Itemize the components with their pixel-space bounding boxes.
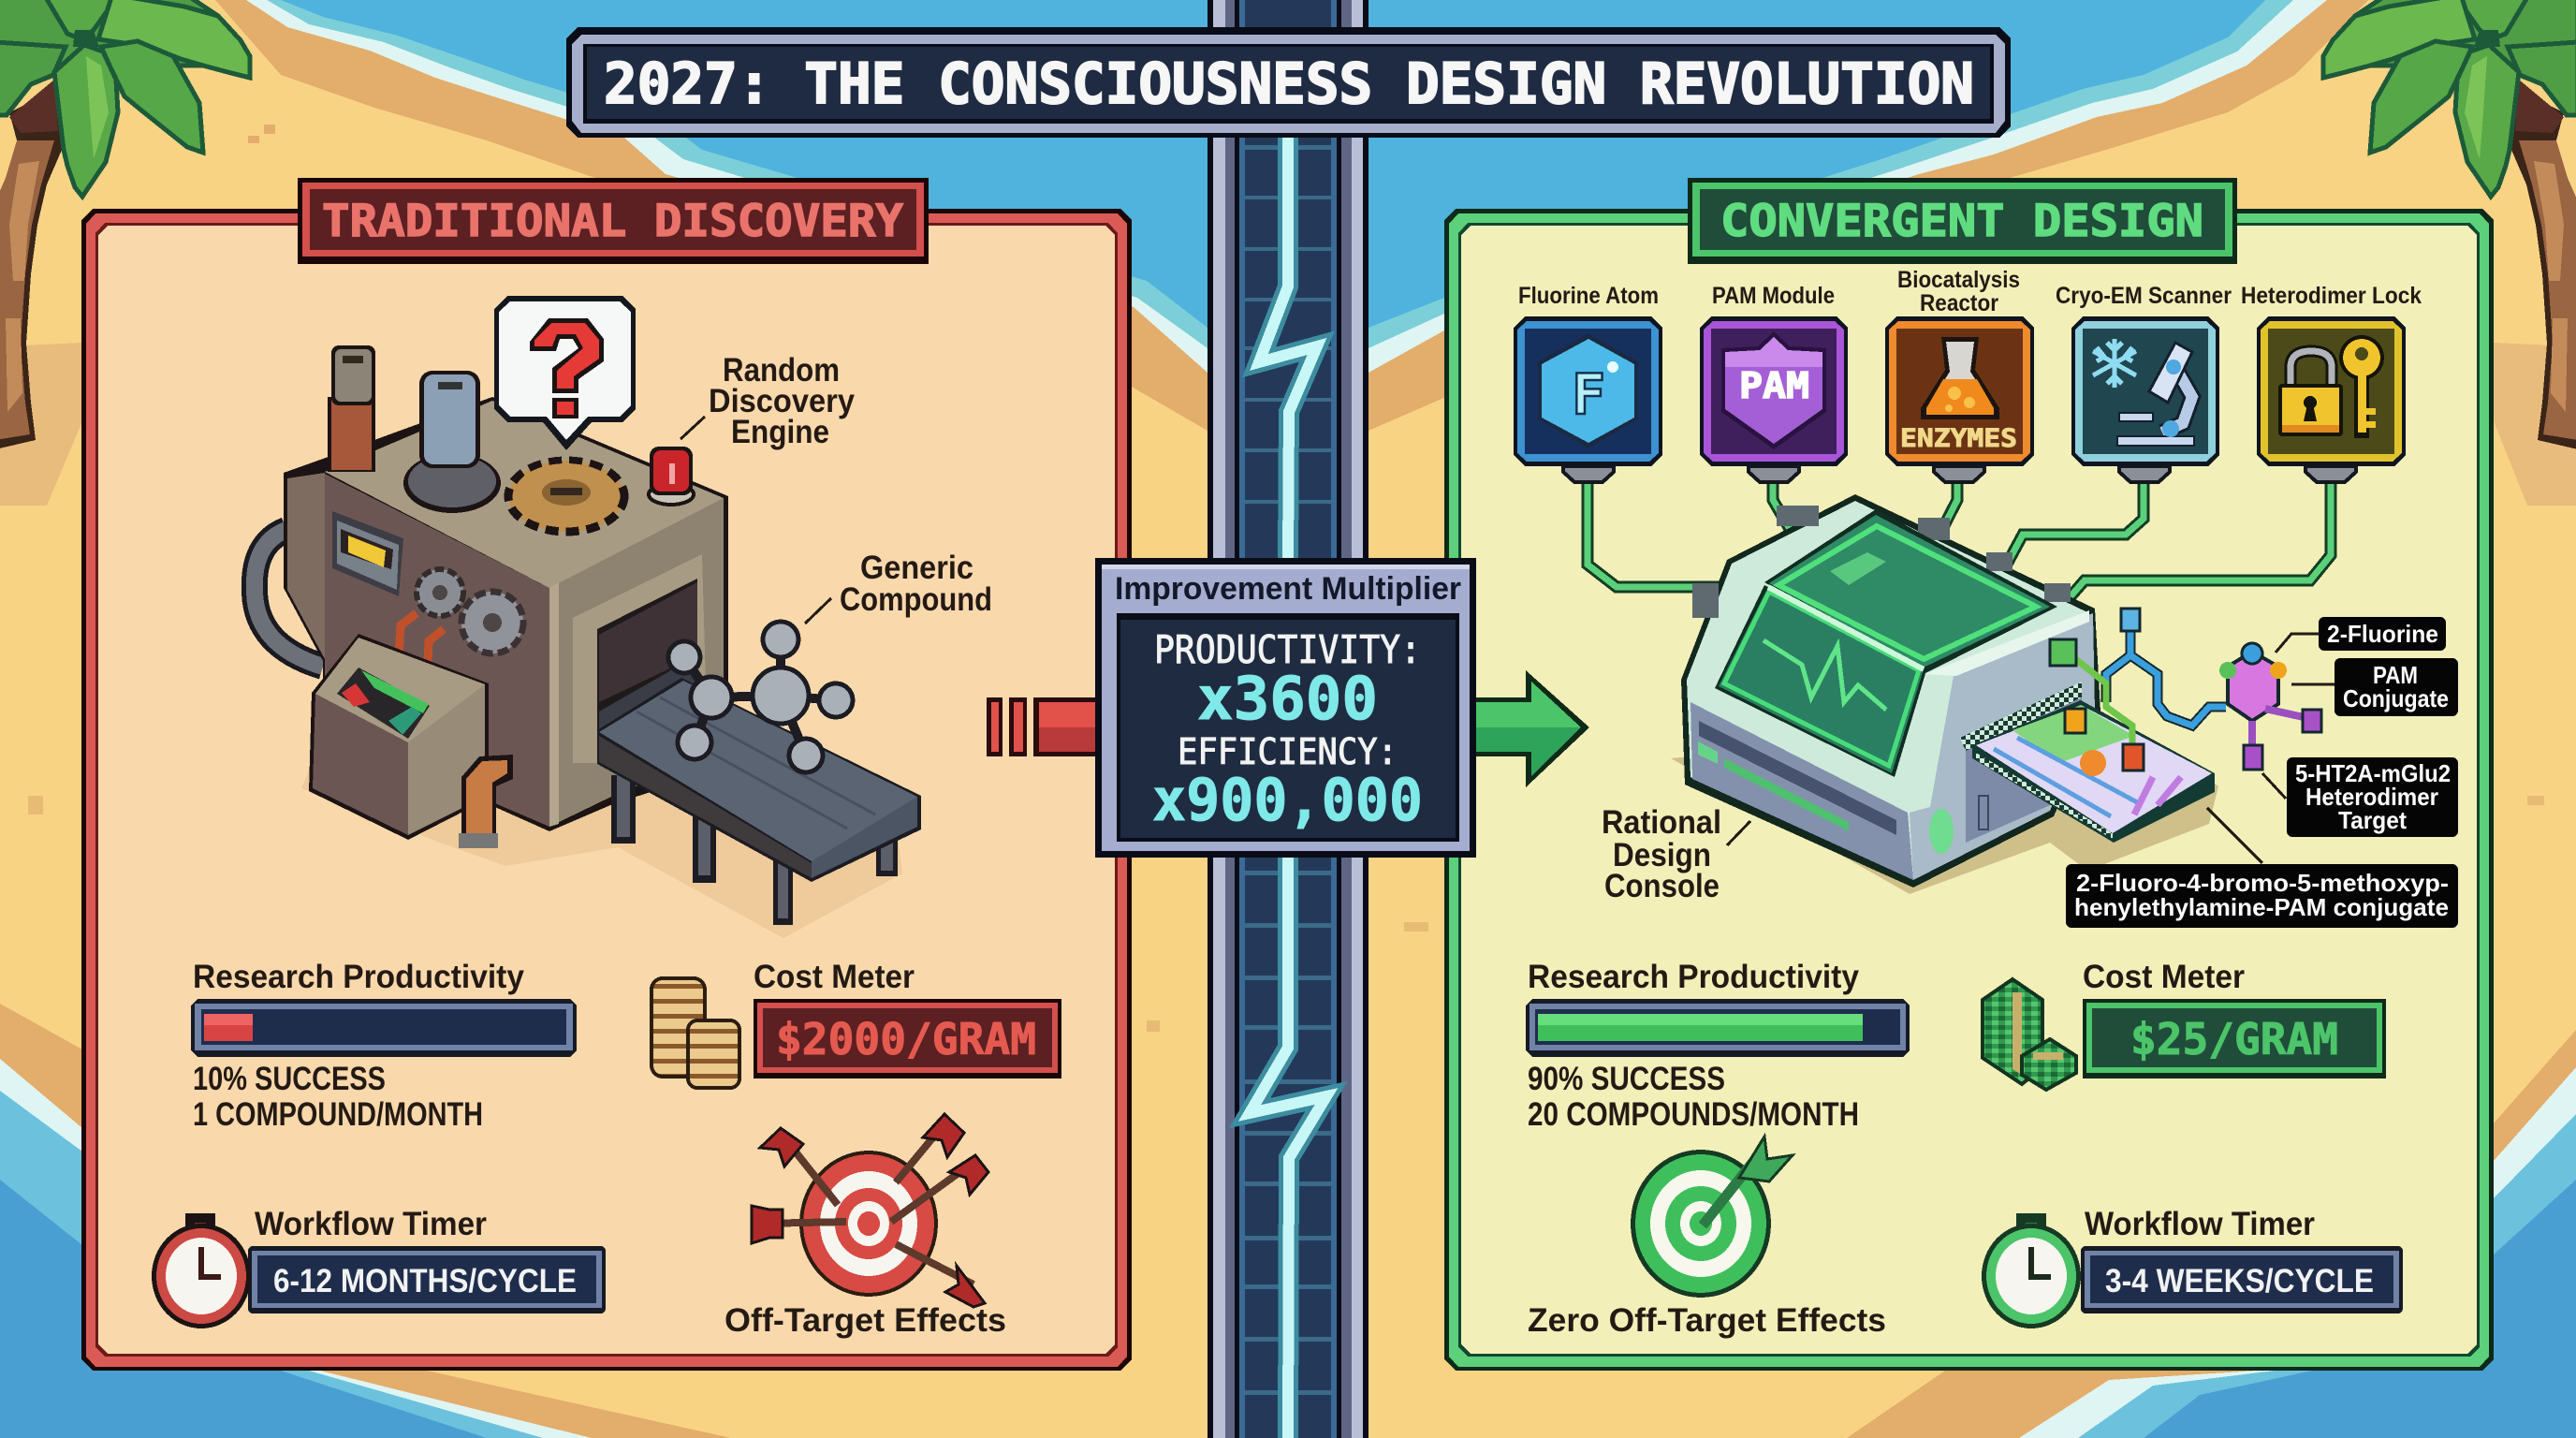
icon: PAM module: PAM Module [1712,283,1835,309]
off-target effects: traditional [724,1114,1006,1339]
cost meter: convergent [1983,959,2386,1090]
trunk [0,80,62,449]
research productivity meter: convergent: 20 COMPOUNDS/MONTH [1528,1096,1859,1133]
label: rational design console: Design [1613,837,1711,873]
label: rational design console [1602,804,1750,904]
callout: conjugate compound name: 2-Fluoro-4-bromo-5-methoxyp- [2076,869,2449,897]
icon: biocatalysis reactor: ENZYMES [1900,424,2017,453]
icon: fluorine atom: Fluorine Atom [1518,283,1659,309]
screen: upper lid [1764,509,2057,674]
icon: PAM module: PAM [1739,365,1809,406]
icon: cash stacks [1983,979,2076,1090]
cost meter: convergent: Cost Meter [2083,959,2245,995]
research productivity meter: traditional [191,959,577,1133]
connector wires [1588,481,2331,604]
conveyor legs [611,775,636,844]
productivity stat: x3600 [1197,665,1378,733]
icon: biocatalysis reactor: Reactor [1920,290,1998,316]
generic compound molecule [668,622,853,772]
multiplier heading: Improvement Multiplier [1115,571,1461,607]
grey gears [417,569,463,616]
speech bubble with question mark [494,296,636,450]
workflow timer: convergent: 3-4 WEEKS/CYCLE [2105,1263,2374,1299]
panel: traditional discovery [81,178,1132,1371]
callout: PAM conjugate: PAM [2373,661,2418,689]
hose [255,530,323,667]
callout: conjugate compound name: henylethylamine-PAM conjugate [2074,893,2449,921]
callout: heterodimer target [2262,757,2458,837]
trunk [2511,80,2576,449]
screen: front with heart trace [1715,585,1926,777]
research productivity meter: traditional: 1 COMPOUND/MONTH [193,1096,483,1133]
control box [309,634,489,840]
heading: traditional discovery: TRADITIONAL DISCOVERY [322,196,904,247]
callout: conjugate compound name [2066,808,2458,928]
bottom-right ocean [1847,1030,2576,1438]
levers [398,613,417,674]
icon: fluorine atom: F [1572,362,1605,428]
icon: biocatalysis reactor [1885,267,2034,482]
callout: heterodimer target: Heterodimer [2305,783,2438,811]
productivity stat: PRODUCTIVITY: [1154,627,1421,672]
leaf mass [2323,0,2576,115]
label: random discovery engine: Discovery [709,383,855,419]
tunnel opening [573,554,708,763]
icon: coin stacks [651,978,739,1088]
label: generic compound: Generic [860,550,973,586]
right side [1910,613,2095,880]
callout: 2-fluorine [2276,617,2446,653]
leaf mass [0,0,250,115]
research productivity meter: traditional: 10% SUCCESS [193,1061,386,1097]
icon: fluorine atom [1514,283,1662,482]
research productivity meter: convergent: Research Productivity [1528,959,1860,995]
label: generic compound: Compound [840,581,992,618]
icon: heterodimer lock: Heterodimer Lock [2241,283,2422,309]
research productivity meter: convergent [1526,959,1910,1133]
vent stacks [328,397,375,472]
off-target effects: traditional: Off-Target Effects [724,1302,1006,1339]
leaves [0,0,250,197]
zero off-target effects: convergent: Zero Off-Target Effects [1528,1302,1886,1339]
heading: convergent design: CONVERGENT DESIGN [1720,196,2203,247]
top ocean [215,0,2368,431]
icon: heterodimer lock [2241,283,2422,482]
yellow gauge [332,511,403,596]
arrow: red input [987,697,1095,756]
label: random discovery engine: Random [723,352,840,389]
callout: PAM conjugate [2291,658,2458,716]
top gear [508,461,624,532]
icon: cryo-EM scanner [2056,283,2232,482]
efficiency stat: EFFICIENCY: [1178,731,1398,772]
icon: green target with centered arrow [1631,1137,1793,1298]
cost meter: convergent: $25/GRAM [2130,1014,2338,1064]
label: rational design console: Rational [1602,804,1721,841]
label: random discovery engine [681,352,855,450]
cost meter: traditional: $2000/GRAM [776,1014,1036,1064]
callout: 2-fluorine: 2-Fluorine [2327,620,2438,648]
lightning line: lower [1250,858,1326,1438]
left palm tree [0,0,250,449]
console silhouette [1681,494,2100,888]
label: random discovery engine: Engine [731,414,829,450]
callout: heterodimer target: 5-HT2A-mGlu2 [2295,759,2451,787]
bottom-left ocean [0,1004,731,1438]
zero off-target effects: convergent [1528,1137,1886,1339]
arrow: green output [1476,670,1589,787]
research productivity meter: convergent: 90% SUCCESS [1528,1061,1725,1097]
wire sockets [1692,506,2071,618]
callout: heterodimer target: Target [2338,806,2407,834]
icon: PAM module [1700,283,1848,482]
lower front [1690,702,1913,880]
productivity stat [1154,627,1421,733]
designed molecule [2050,609,2321,770]
panel: convergent design [1444,178,2494,1371]
heading: convergent design [1688,178,2237,264]
label: generic compound [805,550,992,624]
cost meter: traditional [651,959,1061,1088]
machine: random discovery engine [255,296,921,938]
improvement multiplier panel [1095,558,1476,858]
workflow timer: traditional: 6-12 MONTHS/CYCLE [273,1263,577,1299]
label: rational design console: Console [1604,868,1720,904]
right palm tree [2323,0,2576,449]
lightning line: upper [1259,138,1317,558]
workflow timer: traditional [152,1206,606,1328]
icon: red stopwatch [152,1213,251,1328]
icon: green stopwatch [1982,1213,2081,1328]
efficiency stat [1152,731,1423,834]
copper pipe [461,755,513,848]
icon: cryo-EM scanner: Cryo-EM Scanner [2056,283,2232,309]
icon: red target with scattered arrows [752,1114,988,1307]
workflow timer: traditional: Workflow Timer [255,1206,487,1242]
red button [649,484,694,505]
heading: traditional discovery [298,178,929,264]
research productivity meter: traditional: Research Productivity [193,959,525,995]
workflow timer: convergent: Workflow Timer [2085,1206,2315,1242]
efficiency stat: x900,000 [1152,766,1423,834]
conveyor belt [597,678,921,882]
cost meter: traditional: Cost Meter [754,959,915,995]
workflow timer: convergent [1982,1206,2403,1328]
icon: biocatalysis reactor: Biocatalysis [1897,267,2020,293]
leaves [2323,0,2576,197]
output tray [1972,700,2215,843]
title banner [566,27,2011,138]
callout: PAM conjugate: Conjugate [2343,684,2449,712]
machine housing [284,397,728,831]
machine: rational design console [1671,494,2321,894]
central divider column [1208,0,1368,1438]
title text: 2027: THE CONSCIOUSNESS DESIGN REVOLUTION [604,51,1974,117]
